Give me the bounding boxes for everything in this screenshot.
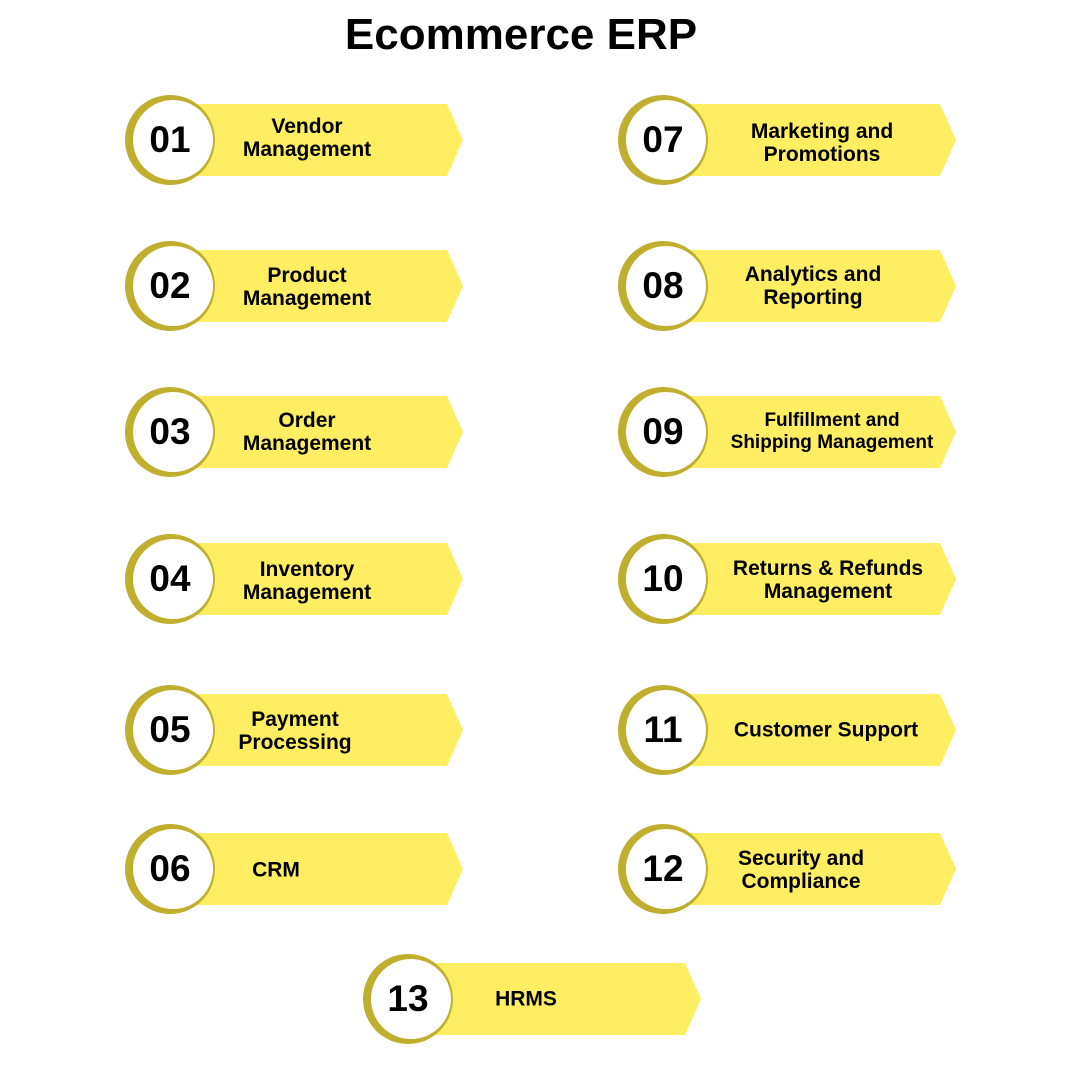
item 03: 03: [149, 411, 191, 452]
title: Ecommerce ERP: [345, 10, 697, 59]
item 07: 07: [642, 119, 684, 160]
text 12: Compliance: [741, 870, 861, 893]
text 04: Management: [243, 581, 371, 604]
item 08: [618, 241, 956, 331]
text 07: Promotions: [764, 143, 880, 166]
item 13: 13: [387, 978, 429, 1019]
item 09: [618, 387, 956, 477]
item 05: [125, 685, 463, 775]
item 12: 12: [642, 848, 684, 889]
text 04: [243, 558, 371, 604]
item 06: 06: [149, 848, 191, 889]
text 03: Order: [278, 409, 336, 432]
item 11: 11: [643, 709, 683, 750]
item 04: [125, 534, 463, 624]
item 02: 02: [149, 265, 191, 306]
text 07: [751, 120, 893, 166]
text 05: Processing: [238, 731, 352, 754]
item 13: [363, 954, 701, 1044]
text 08: [745, 263, 881, 309]
text 05: Payment: [251, 708, 339, 731]
item 09: 09: [642, 411, 684, 452]
item 05: 05: [149, 709, 191, 750]
text 01: Management: [243, 138, 371, 161]
text 08: Reporting: [763, 286, 863, 309]
item 10: 10: [642, 558, 684, 599]
item 03: [125, 387, 463, 477]
text 09: Shipping Management: [731, 432, 933, 453]
item 06: [125, 824, 463, 914]
text 10: Returns & Refunds: [733, 557, 923, 580]
text 09: Fulfillment and: [764, 410, 900, 431]
item 04: 04: [149, 558, 191, 599]
item 08: 08: [642, 265, 684, 306]
text 02: Product: [267, 264, 347, 287]
text 01: [243, 115, 371, 161]
item 11: [618, 685, 956, 775]
text 04: Inventory: [260, 558, 354, 581]
item 07: [618, 95, 956, 185]
text 12: [738, 847, 864, 893]
text 03: Management: [243, 432, 371, 455]
text 10: Management: [764, 580, 892, 603]
item 10: [618, 534, 956, 624]
item 01: 01: [149, 119, 191, 160]
text 05: [238, 708, 352, 754]
item 01: [125, 95, 463, 185]
text 02: [243, 264, 371, 310]
item 02: [125, 241, 463, 331]
text 03: [243, 409, 371, 455]
text 01: Vendor: [271, 115, 343, 138]
text 07: Marketing and: [751, 120, 893, 143]
text 10: [733, 557, 923, 603]
text 13: HRMS: [495, 988, 557, 1010]
text 02: Management: [243, 287, 371, 310]
item 12: [618, 824, 956, 914]
text 09: [731, 410, 934, 453]
text 11: Customer Support: [734, 718, 918, 742]
text 06: CRM: [252, 858, 300, 882]
text 08: Analytics and: [745, 263, 881, 286]
text 12: Security and: [738, 847, 864, 870]
